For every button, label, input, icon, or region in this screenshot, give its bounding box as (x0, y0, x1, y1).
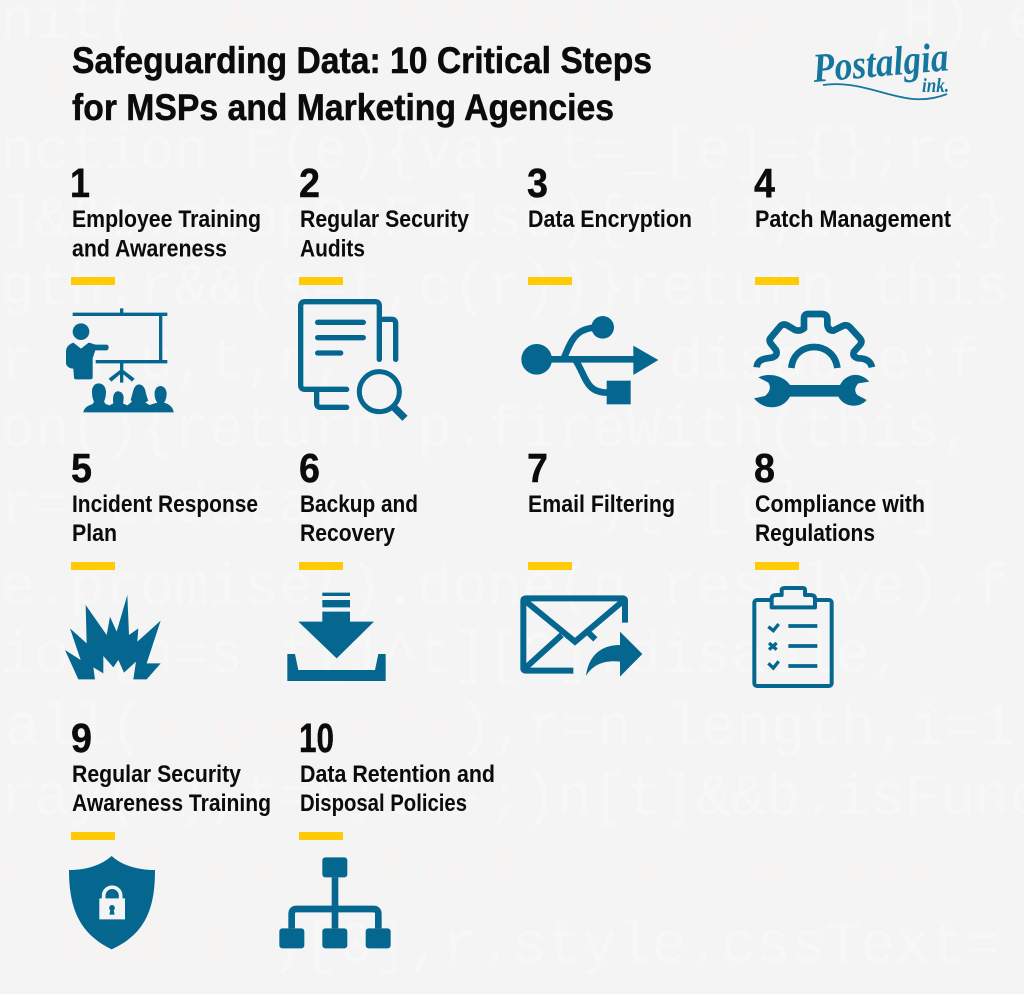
background: faded source code: disable:f (668, 331, 981, 396)
logo: Postalgia ink: Postalgia (810, 33, 950, 91)
label 2: Audits (300, 236, 365, 262)
label 10: Data Retention and (300, 761, 495, 788)
number 7: 7 (527, 445, 548, 491)
label 1: and Awareness (72, 236, 227, 262)
label 6 (300, 491, 418, 547)
icon: shield with padlock (69, 856, 155, 949)
accent bar 6 (299, 562, 343, 570)
label 2: Regular Security (300, 206, 469, 233)
label 5 (72, 491, 258, 547)
step 8 (754, 445, 925, 686)
number 1: 1 (70, 160, 90, 206)
number 10: 10 (299, 715, 334, 761)
accent bar 3 (528, 277, 572, 285)
label 6: Backup and (300, 491, 418, 518)
number 2: 2 (299, 160, 320, 206)
label 8 (755, 491, 925, 547)
label 6: Recovery (300, 520, 395, 547)
label 9 (72, 761, 271, 817)
background: faded source code: um (0, 53, 70, 118)
label 7: Email Filtering (528, 491, 675, 518)
accent bar 9 (71, 832, 115, 840)
background: faded source code: ion{n=s t[1^t][2].disable, (0, 625, 905, 690)
background: faded source code: </table><a href='/a'>a</a>< (0, 841, 940, 906)
background: faded source code: i){r[t]= n] (560, 475, 943, 540)
label 10: Disposal Policies (300, 790, 467, 817)
title: Safeguarding Data: 10 Critical Steps (72, 40, 652, 81)
icon: USB symbol (521, 316, 658, 404)
step 3 (521, 160, 692, 404)
background: faded source code: all( (5, 697, 144, 762)
step 5 (65, 445, 258, 679)
icon: clipboard checklist (754, 588, 832, 686)
label 10 (300, 761, 495, 817)
label 3: Data Encryption (528, 206, 692, 233)
title: for MSPs and Marketing Agencies (72, 87, 614, 128)
number 9: 9 (71, 715, 92, 761)
label 2 (300, 206, 469, 262)
icon: explosion (65, 595, 161, 679)
icon: hierarchy tree (279, 857, 391, 948)
label 5: Incident Response (72, 491, 258, 518)
background: faded source code: "input" (25, 915, 269, 980)
step 4 (754, 160, 951, 407)
background: faded source code: ]&&t.stopOnFalse){r=!1;break} (0, 189, 1009, 254)
number 8: 8 (754, 445, 775, 491)
label 9: Awareness Training (72, 790, 271, 817)
accent bar 1 (71, 277, 115, 285)
logo: Postalgia ink: ink. (922, 75, 949, 97)
step 7 (523, 445, 675, 677)
background: faded source code: r=+t.data(), (0, 475, 418, 540)
title (72, 40, 652, 128)
background: faded source code: gth:r&&(s=t,c(r))}return this (0, 257, 1009, 322)
accent bar 7 (528, 562, 572, 570)
icon: envelope with forward arrow (523, 598, 642, 677)
step 6 (287, 445, 418, 681)
step 10 (279, 715, 495, 948)
number 3: 3 (527, 160, 548, 206)
step 9 (69, 715, 271, 949)
label 1: Employee Training (72, 206, 261, 233)
background: faded source code: r n u,t,n, (0, 331, 348, 396)
label 9: Regular Security (72, 761, 241, 788)
icon: gear and wrench (754, 314, 872, 407)
accent bar 5 (71, 562, 115, 570)
accent bar 4 (755, 277, 799, 285)
background: faded source code: nction F(e){var t=_[e]={};re (0, 121, 975, 186)
icon: presenter with audience (66, 308, 174, 412)
label 5: Plan (72, 520, 117, 547)
icon: download to tray (287, 593, 386, 681)
background: faded source code: ray(r),t=r;t--;)n[t]&&b.isFunc (0, 767, 1024, 832)
label 1 (72, 206, 261, 262)
number 5: 5 (71, 445, 92, 491)
label 4: Patch Management (755, 206, 951, 233)
background: faded source code: )[0],r.style.cssText= (269, 915, 1000, 980)
accent bar 8 (755, 562, 799, 570)
number 6: 6 (299, 445, 320, 491)
background: faded source code: e.promise().done(n.resolve).f (0, 557, 1009, 622)
background: faded source code: arguments),r=n.length,i=1 (144, 697, 1014, 762)
label 8: Regulations (755, 520, 875, 547)
background: faded source code: on(){return p.fireWith(this, (0, 399, 975, 464)
step 1 (66, 160, 261, 412)
background: faded source code: on (560, 53, 630, 118)
icon: documents and magnifier (301, 302, 405, 418)
label 8: Compliance with (755, 491, 925, 518)
accent bar 2 (299, 277, 343, 285)
step 2 (299, 160, 469, 418)
accent bar 10 (299, 832, 343, 840)
number 4: 4 (754, 160, 775, 206)
